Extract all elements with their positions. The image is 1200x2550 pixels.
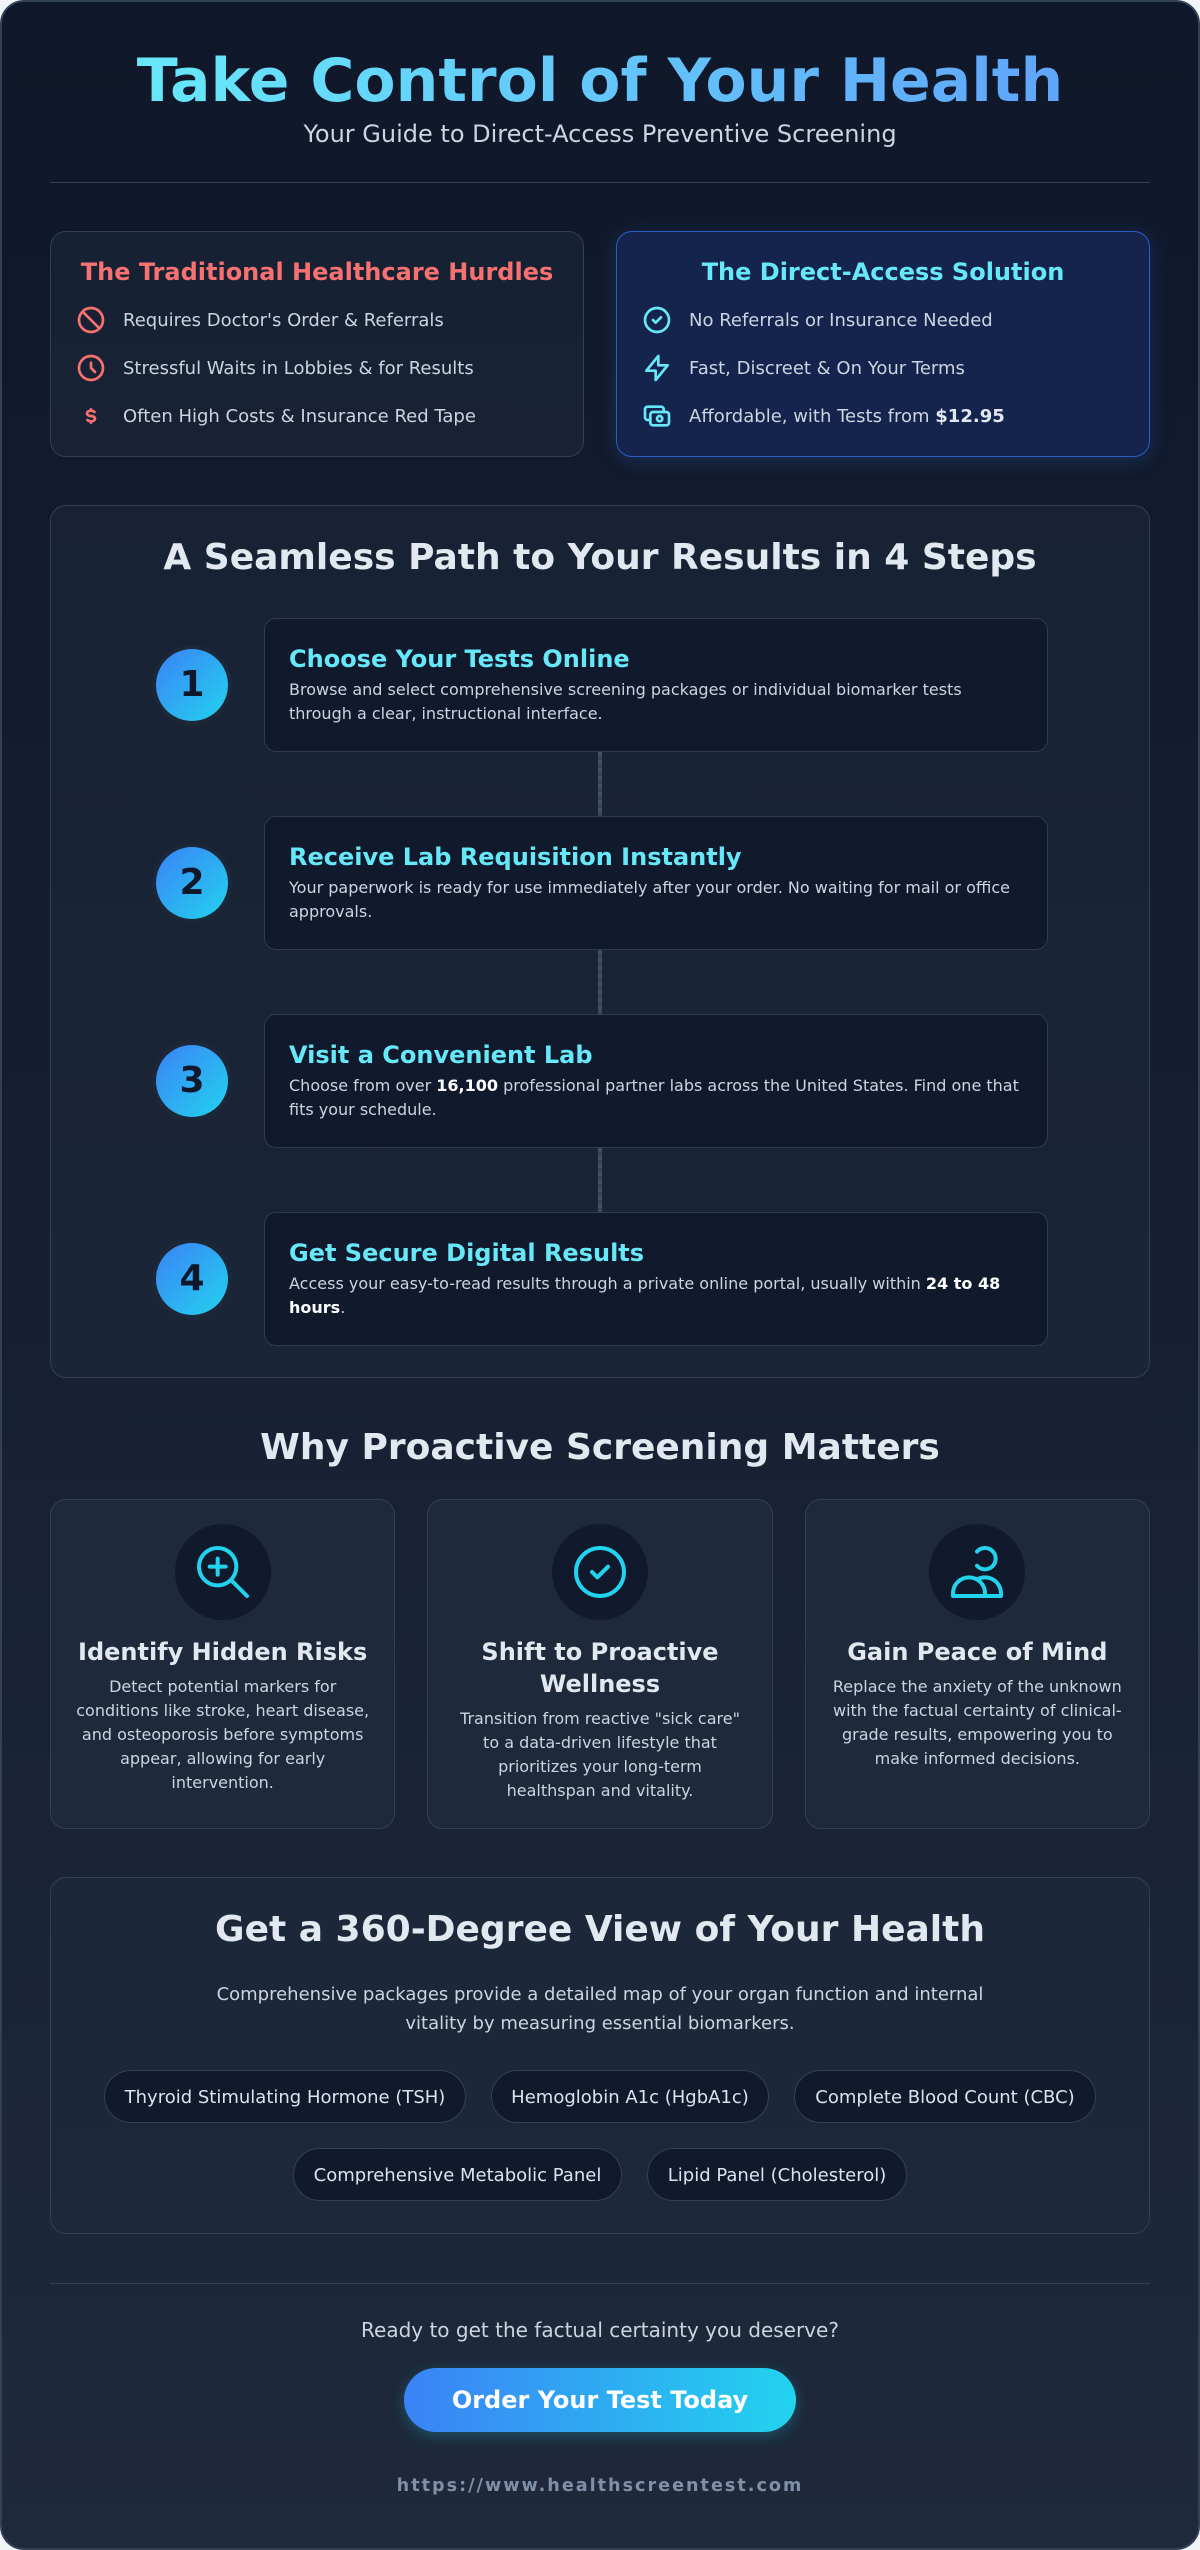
panel: peace of mind bbox=[805, 1499, 1150, 1829]
text: packages bbox=[217, 1984, 983, 2034]
step 3 title: Visit a Convenient Lab bbox=[289, 1041, 593, 1069]
step 1 number bbox=[156, 649, 228, 721]
panel: traditional healthcare hurdles bbox=[50, 231, 584, 457]
icon: no symbol bbox=[78, 306, 104, 334]
text: waits: Stressful Waits in Lobbies & for Results bbox=[123, 358, 474, 379]
card heading: Gain Peace of Mind bbox=[847, 1638, 1107, 1666]
text: fast: Fast, Discreet & On Your Terms bbox=[689, 358, 965, 379]
step 1 title: Choose Your Tests Online bbox=[289, 645, 630, 673]
text: call to action prompt: Ready to get the factual certainty you deserve? bbox=[361, 2318, 839, 2342]
biomarker pill: lipid: Lipid Panel (Cholesterol) bbox=[668, 2165, 886, 2186]
card text: grade results, empowering you to bbox=[842, 1725, 1113, 1744]
text: packages: vitality by measuring essential biomarkers. bbox=[405, 2013, 795, 2034]
card text bbox=[460, 1709, 740, 1800]
card text: Replace the anxiety of the unknown bbox=[833, 1677, 1122, 1696]
text: no referrals: No Referrals or Insurance Needed bbox=[689, 310, 993, 331]
card heading: Wellness bbox=[540, 1670, 660, 1698]
card heading bbox=[481, 1638, 719, 1698]
icon: people bbox=[929, 1524, 1025, 1620]
biomarker pill: TSH: Thyroid Stimulating Hormone (TSH) bbox=[125, 2087, 445, 2108]
panel: 360 degree view bbox=[50, 1877, 1150, 2234]
card text: healthspan and vitality. bbox=[507, 1781, 693, 1800]
step 4 description: Access your easy-to-read results through a private online portal, usually within 24 to 48 bbox=[289, 1274, 1000, 1293]
icon: cash bbox=[644, 405, 670, 427]
biomarker pill: HbA1c: Hemoglobin A1c (HgbA1c) bbox=[511, 2087, 749, 2108]
title: Take Control of Your Health bbox=[137, 46, 1063, 116]
step 2 description: approvals. bbox=[289, 902, 372, 921]
panel: hidden risks bbox=[50, 1499, 395, 1829]
icon: bolt bbox=[644, 354, 670, 382]
subtitle: Your Guide to Direct-Access Preventive Screening bbox=[303, 120, 897, 148]
icon: magnifier plus bbox=[175, 1524, 271, 1620]
card text: and osteoporosis before symptoms bbox=[82, 1725, 363, 1744]
card text: make informed decisions. bbox=[875, 1749, 1080, 1768]
step 4 description: hours. bbox=[289, 1298, 345, 1317]
step 4 title: Get Secure Digital Results bbox=[289, 1239, 644, 1267]
icon: dollar bbox=[86, 408, 96, 424]
card heading: Shift to Proactive bbox=[481, 1638, 719, 1666]
biomarker pill: CBC: Complete Blood Count (CBC) bbox=[815, 2087, 1075, 2108]
text: referrals: Requires Doctor's Order & Referrals bbox=[123, 310, 444, 331]
step 3 number: 3 bbox=[179, 1060, 205, 1101]
step 4 number bbox=[156, 1243, 228, 1315]
biomarker pill: CMP bbox=[293, 2148, 622, 2201]
button: order: Order Your Test Today bbox=[452, 2386, 748, 2414]
step 1 card bbox=[264, 618, 1048, 752]
step 2 number bbox=[156, 847, 228, 919]
card text: Transition from reactive "sick care" bbox=[460, 1709, 740, 1728]
step 2 number: 2 bbox=[179, 862, 205, 903]
card text: conditions like stroke, heart disease, bbox=[76, 1701, 369, 1720]
button: order bbox=[404, 2368, 796, 2432]
step 4 description bbox=[289, 1274, 1000, 1317]
card text bbox=[76, 1677, 369, 1792]
step 3 description bbox=[289, 1076, 1019, 1119]
heading: 360: Get a 360-Degree View of Your Health bbox=[215, 1909, 985, 1950]
card text: prioritizes your long-term bbox=[498, 1757, 702, 1776]
icon: check circle bbox=[552, 1524, 648, 1620]
step 4 card bbox=[264, 1212, 1048, 1346]
step 3 number bbox=[156, 1045, 228, 1117]
card text: Detect potential markers for bbox=[109, 1677, 336, 1696]
card text: appear, allowing for early bbox=[120, 1749, 325, 1768]
footer url: https://www.healthscreentest.com bbox=[397, 2476, 803, 2496]
step 1 description: Browse and select comprehensive screening packages or individual biomarker tests bbox=[289, 680, 962, 699]
step 3 description: Choose from over 16,100 professional partner labs across the United States. Find one that bbox=[289, 1076, 1019, 1095]
card text: intervention. bbox=[171, 1773, 274, 1792]
icon: clock bbox=[78, 354, 104, 382]
step 1 number: 1 bbox=[179, 664, 205, 705]
step 2 title: Receive Lab Requisition Instantly bbox=[289, 843, 742, 871]
step 2 card bbox=[264, 816, 1048, 950]
text: packages: Comprehensive packages provide a detailed map of your organ function and internal bbox=[217, 1984, 983, 2005]
panel: four steps bbox=[50, 505, 1150, 1378]
step 1 description: through a clear, instructional interface. bbox=[289, 704, 603, 723]
heading: steps: A Seamless Path to Your Results in 4 Steps bbox=[163, 537, 1037, 578]
heading: solution: The Direct-Access Solution bbox=[702, 258, 1064, 286]
step 2 description: Your paperwork is ready for use immediately after your order. No waiting for mail or office bbox=[289, 878, 1010, 897]
step 3 card bbox=[264, 1014, 1048, 1148]
heading: why screening matters: Why Proactive Screening Matters bbox=[260, 1427, 940, 1468]
card text bbox=[833, 1677, 1122, 1768]
icon: check circle bbox=[644, 306, 670, 334]
panel: proactive wellness bbox=[427, 1499, 773, 1829]
step 3 description: fits your schedule. bbox=[289, 1100, 437, 1119]
biomarker pill: CMP: Comprehensive Metabolic Panel bbox=[314, 2165, 601, 2186]
biomarker pill: CBC bbox=[794, 2070, 1096, 2123]
card text: with the factual certainty of clinical- bbox=[833, 1701, 1122, 1720]
card text: to a data-driven lifestyle that bbox=[483, 1733, 717, 1752]
step 1 description bbox=[289, 680, 962, 723]
step 4 number: 4 bbox=[179, 1258, 205, 1299]
text: affordable: Affordable, with Tests from $12.95 bbox=[689, 406, 1005, 427]
panel: direct-access solution bbox=[616, 231, 1150, 457]
text: costs: Often High Costs & Insurance Red Tape bbox=[123, 406, 476, 427]
step 2 description bbox=[289, 878, 1010, 921]
biomarker pill: HbA1c bbox=[491, 2070, 769, 2123]
biomarker pill: TSH bbox=[104, 2070, 466, 2123]
heading: hurdles: The Traditional Healthcare Hurdles bbox=[81, 258, 553, 286]
card heading: Identify Hidden Risks bbox=[78, 1638, 367, 1666]
biomarker pill: lipid bbox=[647, 2148, 907, 2201]
